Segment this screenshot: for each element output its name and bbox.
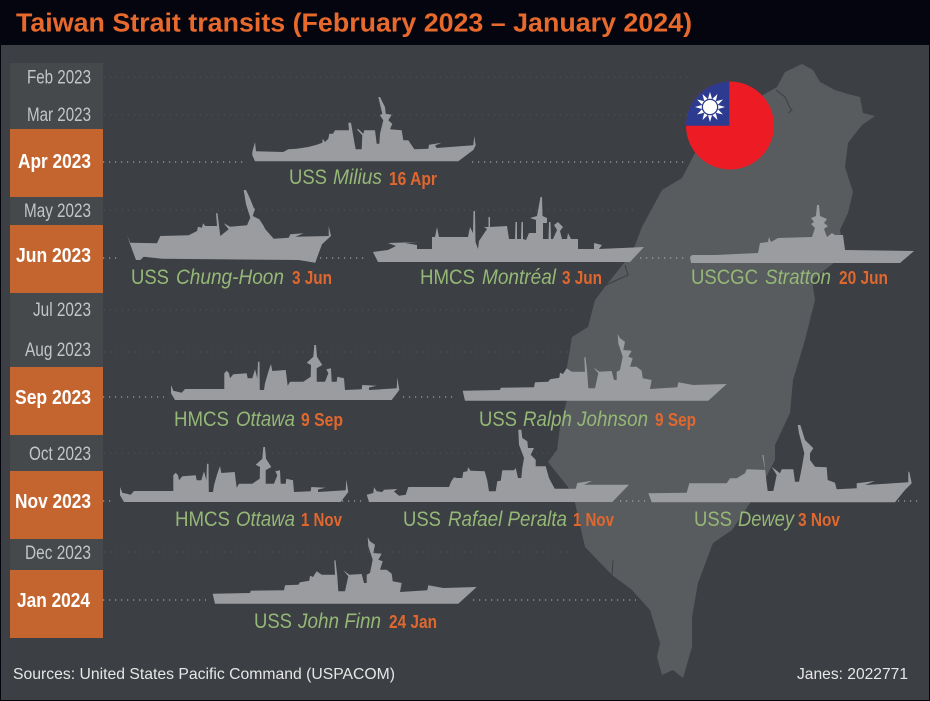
label: HMCS Ottawa, 9 Sep: 9 Sep xyxy=(301,410,343,430)
label: USS John Finn: John Finn xyxy=(297,609,381,633)
timeline column: Sep 2023 xyxy=(15,387,91,409)
timeline column: Nov 2023 xyxy=(15,491,91,513)
timeline column: Jun 2023 xyxy=(16,245,91,267)
ship: USS Dewey xyxy=(648,425,912,502)
label: USS Ralph Johnson: 9 Sep xyxy=(655,410,696,430)
timeline column: Aug 2023 xyxy=(25,339,91,361)
flag of Taiwan xyxy=(686,82,774,170)
timeline column: Jan 2024 xyxy=(17,590,91,612)
map: Taiwan island silhouette xyxy=(548,64,875,678)
timeline column: Dec 2023 xyxy=(25,542,91,564)
label: USCGC Stratton: 20 Jun xyxy=(839,268,888,288)
label: USS Chung-Hoon: Chung-Hoon xyxy=(176,265,284,289)
icon: white sun xyxy=(695,92,725,122)
label: USS Ralph Johnson xyxy=(479,407,696,431)
label: USS Milius: 16 Apr xyxy=(389,169,437,189)
label: HMCS Montréal: Montréal xyxy=(482,265,557,289)
timeline column: May 2023 xyxy=(24,200,91,222)
label: USS John Finn: USS xyxy=(254,609,292,633)
ship: USS John Finn xyxy=(213,537,477,604)
label: HMCS Ottawa, 1 Nov xyxy=(175,507,342,531)
timeline column: Apr 2023 xyxy=(18,151,91,173)
label: HMCS Ottawa, 1 Nov: HMCS xyxy=(175,507,230,531)
label: USS Milius xyxy=(289,165,437,189)
label: USS John Finn xyxy=(254,609,437,633)
timeline column: Feb 2023 xyxy=(27,66,91,88)
ship: USS Chung-Hoon xyxy=(127,190,331,263)
label: USS Rafael Peralta: 1 Nov xyxy=(573,510,614,530)
label: HMCS Montréal: HMCS xyxy=(420,265,475,289)
ship: USS Rafael Peralta xyxy=(367,430,629,502)
label: USS Milius: USS xyxy=(289,165,327,189)
ship: HMCS Ottawa, 1 Nov xyxy=(120,447,348,502)
label: HMCS Ottawa, 1 Nov: 1 Nov xyxy=(301,510,342,530)
ship: USCGC Stratton xyxy=(690,205,914,263)
ship: HMCS Ottawa, 9 Sep xyxy=(171,345,399,400)
ship: HMCS Montréal xyxy=(373,197,644,262)
label: HMCS Montréal: 3 Jun xyxy=(562,268,602,288)
label: USS Dewey: Dewey xyxy=(738,507,795,531)
label: USS Rafael Peralta: Rafael Peralta xyxy=(448,507,567,531)
label: USS Rafael Peralta xyxy=(403,507,614,531)
label: USCGC Stratton: USCGC xyxy=(691,265,758,289)
label: HMCS Ottawa, 9 Sep xyxy=(174,407,343,431)
label: USS Rafael Peralta: USS xyxy=(403,507,441,531)
label: USS Dewey: 3 Nov xyxy=(798,510,840,530)
label: USS Ralph Johnson: Ralph Johnson xyxy=(523,407,648,431)
timeline column: Oct 2023 xyxy=(29,443,91,465)
sources note: Sources: United States Pacific Command (USPACOM) xyxy=(13,666,395,683)
label: USS Dewey: USS xyxy=(694,507,732,531)
label: USCGC Stratton xyxy=(691,265,888,289)
label: HMCS Ottawa, 9 Sep: HMCS xyxy=(174,407,229,431)
timeline column: Mar 2023 xyxy=(27,104,91,126)
label: USS Milius: Milius xyxy=(333,165,382,189)
label: USS Chung-Hoon xyxy=(131,265,332,289)
label: USS Chung-Hoon: USS xyxy=(131,265,169,289)
label: USS Dewey xyxy=(694,507,840,531)
label: USS Chung-Hoon: 3 Jun xyxy=(292,268,332,288)
timeline column xyxy=(10,63,103,638)
label: USCGC Stratton: Stratton xyxy=(765,265,831,289)
credit: Janes: 2022771 xyxy=(797,666,908,683)
label: USS Ralph Johnson: USS xyxy=(479,407,517,431)
label: HMCS Montréal xyxy=(420,265,602,289)
ship: USS Milius xyxy=(252,97,476,161)
timeline column: Jul 2023 xyxy=(33,299,91,321)
ship: USS Ralph Johnson xyxy=(463,334,727,401)
label: USS John Finn: 24 Jan xyxy=(389,612,437,632)
label: HMCS Ottawa, 1 Nov: Ottawa xyxy=(236,507,295,531)
label: HMCS Ottawa, 9 Sep: Ottawa xyxy=(236,407,295,431)
title: Taiwan Strait transits (February 2023 – January 2024) xyxy=(16,10,692,38)
